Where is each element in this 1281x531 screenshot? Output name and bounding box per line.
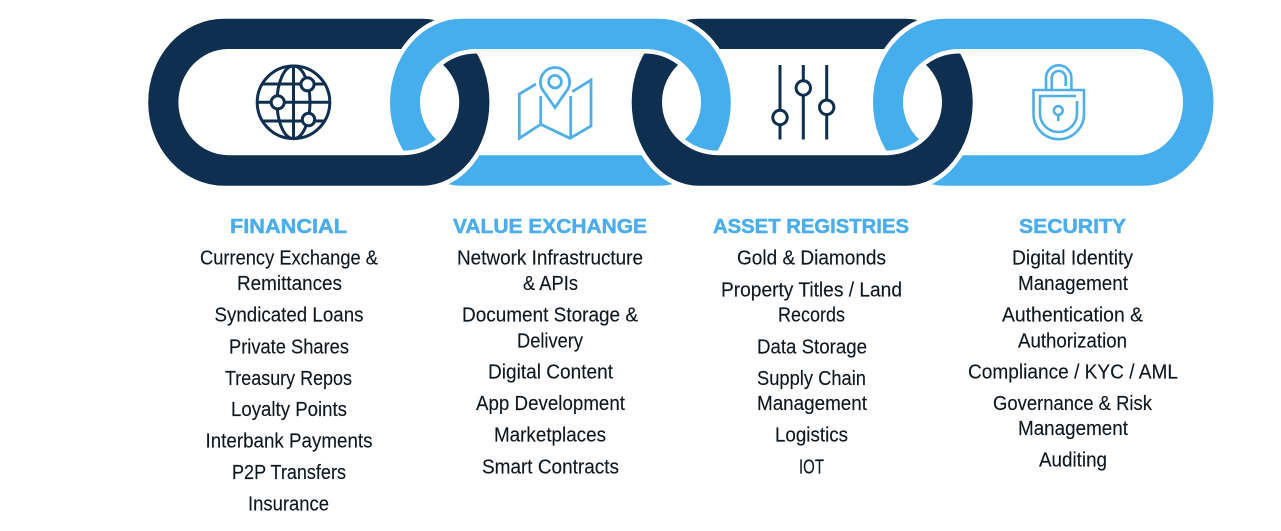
list: financial items: Treasury Repos xyxy=(225,367,352,390)
link: asset registries (dark) xyxy=(632,19,973,186)
list: security items: Compliance / KYC / AML xyxy=(968,360,1178,383)
list: security items: Management xyxy=(1018,272,1128,295)
column: asset registries xyxy=(713,215,909,478)
icon: globe network xyxy=(257,66,330,139)
list: security items xyxy=(968,246,1178,472)
interlock: asset registries over value exchange xyxy=(632,100,720,184)
list: financial items: Currency Exchange & xyxy=(200,246,378,269)
list: asset registries items xyxy=(721,246,902,478)
list: financial items: Loyalty Points xyxy=(231,398,347,421)
list: asset registries items: Supply Chain xyxy=(757,367,866,390)
heading: financial: FINANCIAL xyxy=(230,215,347,238)
list: value exchange items: Smart Contracts xyxy=(482,455,619,478)
list: value exchange items: Delivery xyxy=(517,330,584,352)
list: financial items: Syndicated Loans xyxy=(214,304,364,327)
list: security items: Digital Identity xyxy=(1012,246,1134,269)
interlock: asset registries over security xyxy=(884,100,973,184)
list: security items: Management xyxy=(1018,417,1128,440)
link: financial (dark) xyxy=(148,19,489,186)
column: value exchange xyxy=(453,215,647,478)
heading: value exchange: VALUE EXCHANGE xyxy=(453,215,647,238)
icon: open padlock xyxy=(1034,65,1084,139)
icon: sliders xyxy=(773,65,834,140)
link: value exchange (light) xyxy=(390,19,731,186)
list: financial items: Interbank Payments xyxy=(206,429,372,452)
list: asset registries items: Property Titles / Land xyxy=(721,278,902,302)
list: financial items: Insurance xyxy=(248,493,329,516)
icon: map with location pin xyxy=(519,68,591,138)
interlock: financial over value exchange xyxy=(401,100,490,184)
list: value exchange items: Digital Content xyxy=(488,360,613,383)
list: value exchange items xyxy=(457,246,643,478)
list: asset registries items: Data Storage xyxy=(757,335,867,358)
list: financial items: P2P Transfers xyxy=(232,461,346,484)
column: security xyxy=(968,215,1178,472)
list: security items: Authentication & xyxy=(1002,304,1143,327)
list: asset registries items: Records xyxy=(778,304,845,327)
list: value exchange items: Document Storage & xyxy=(462,304,638,327)
link: security (light) xyxy=(873,19,1214,186)
heading: asset registries: ASSET REGISTRIES xyxy=(713,215,909,238)
list: financial items xyxy=(200,246,378,516)
list: value exchange items: App Development xyxy=(476,392,625,415)
heading: security: SECURITY xyxy=(1019,215,1126,238)
list: financial items: Remittances xyxy=(237,272,342,295)
column: financial xyxy=(200,215,378,516)
list: asset registries items: Gold & Diamonds xyxy=(737,246,886,269)
list: security items: Authorization xyxy=(1018,330,1127,352)
list: asset registries items: Logistics xyxy=(775,424,848,447)
list: value exchange items: Network Infrastructure xyxy=(457,246,643,269)
list: security items: Auditing xyxy=(1039,449,1107,472)
list: value exchange items: Marketplaces xyxy=(494,424,606,447)
list: asset registries items: IOT xyxy=(799,455,824,478)
list: asset registries items: Management xyxy=(757,392,867,415)
list: security items: Governance & Risk xyxy=(993,392,1153,415)
list: value exchange items: & APIs xyxy=(523,272,578,295)
list: financial items: Private Shares xyxy=(229,335,349,358)
chain of four interlocking links xyxy=(148,19,1214,186)
